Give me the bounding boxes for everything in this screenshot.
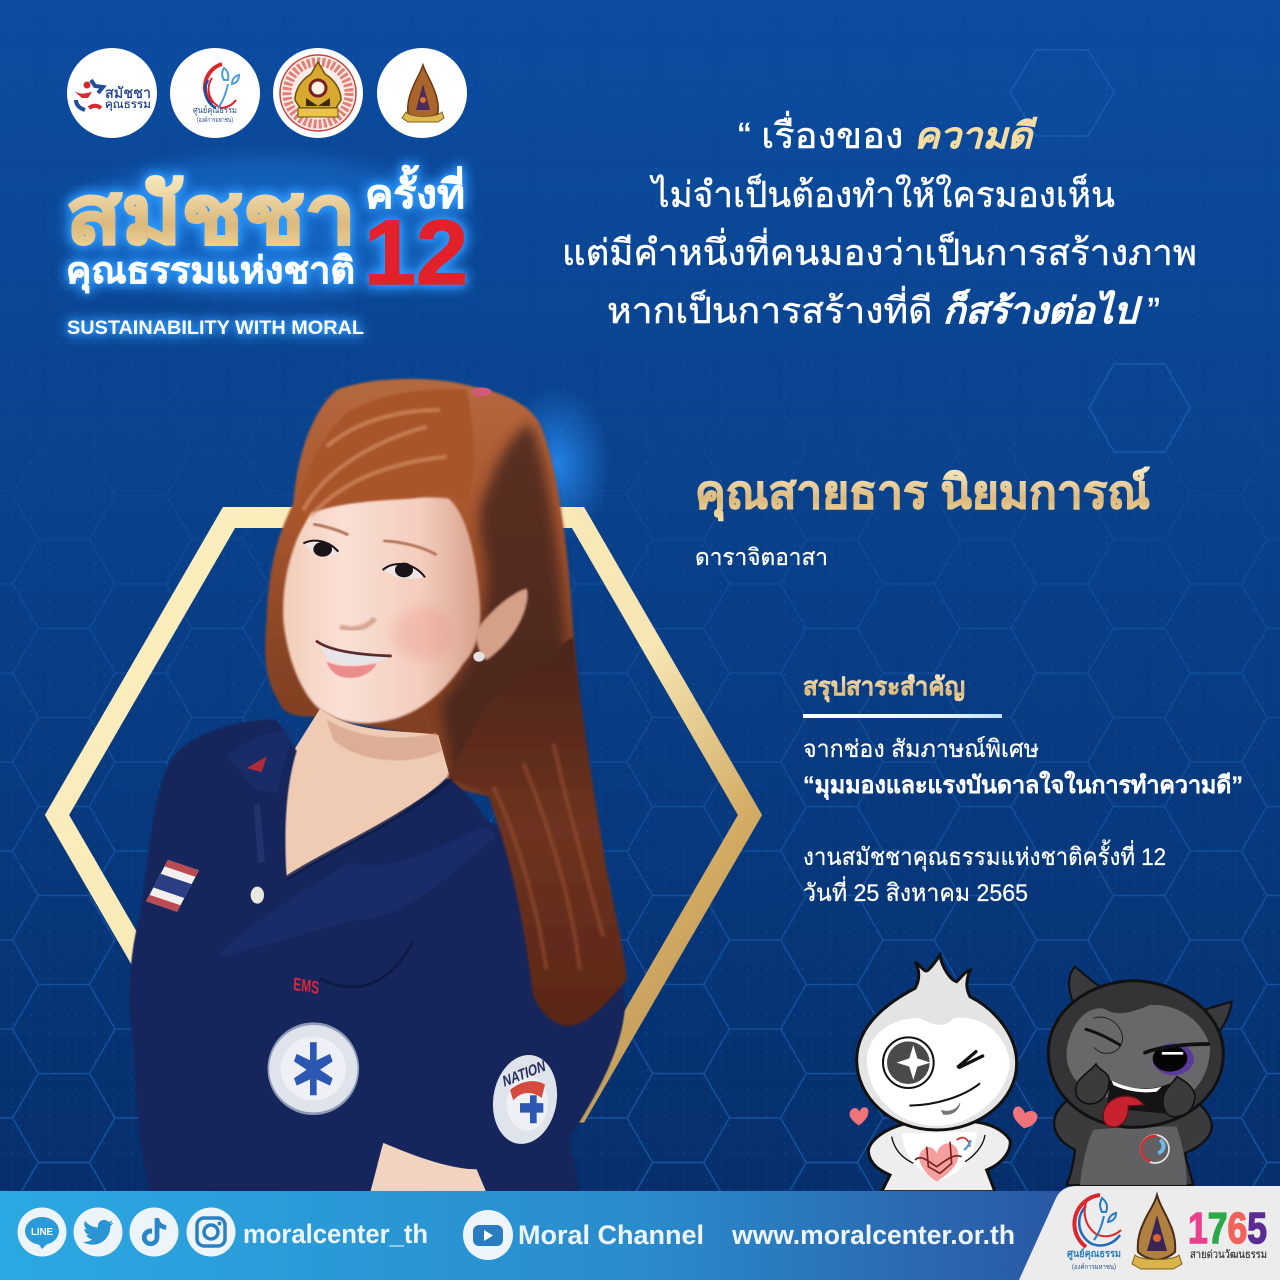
sleeve badge: NATION <box>502 1056 547 1090</box>
blush <box>393 607 453 660</box>
website: www.moralcenter.or.th <box>731 1220 1015 1250</box>
handle: moralcenter_th <box>243 1219 428 1249</box>
face mask <box>1067 1005 1210 1100</box>
star eye <box>883 1037 934 1088</box>
quote <box>562 111 1197 331</box>
horns <box>1069 967 1100 1003</box>
footer logo: crest <box>1132 1195 1182 1269</box>
nose shadow <box>340 618 375 629</box>
eyes and brows <box>303 524 437 579</box>
scrunchie <box>472 387 492 397</box>
quote line 4: หากเป็นการสร้างที่ดี ก็สร้างต่อไป ” <box>607 286 1160 331</box>
title lockup <box>45 145 485 339</box>
winking eye <box>958 1052 983 1067</box>
logo: กระทรวงวัฒนธรรม crest <box>377 48 467 138</box>
ear <box>476 588 528 660</box>
portrait <box>130 379 627 1193</box>
neck <box>282 709 450 878</box>
white corner panel <box>1019 1186 1280 1280</box>
footer logo: crescent: (องค์การมหาชน) <box>1072 1263 1116 1271</box>
icon: Instagram <box>186 1208 236 1256</box>
body <box>1054 1097 1212 1185</box>
mouth <box>1107 1080 1170 1113</box>
head and front hair <box>283 387 627 1026</box>
logo: ศูนย์คุณธรรม: (องค์การมหาชน) <box>197 116 233 124</box>
hearts <box>850 1107 868 1125</box>
open eye <box>1153 1043 1194 1075</box>
logo: สมัชชาคุณธรรม: สมัชชา <box>105 85 151 102</box>
mascots <box>850 955 1232 1192</box>
summary heading: สรุปสาระสำคัญ <box>803 673 965 703</box>
summary text <box>803 735 1243 907</box>
gold hexagon frame <box>57 518 750 1112</box>
white mascot <box>850 955 1037 1192</box>
collar <box>220 730 497 958</box>
hands <box>1076 1064 1109 1104</box>
heart hands <box>919 1143 959 1182</box>
name: คุณสายธาร นิยมการณ์ <box>695 466 1150 521</box>
title: คุณธรรมแห่งชาติ: คุณธรรมแห่งชาติ <box>66 250 355 294</box>
footer bar <box>0 1186 1280 1280</box>
footer logo: crescent <box>1067 1195 1121 1271</box>
quote line 2: ไม่จำเป็นต้องทำให้ใครมองเห็น <box>649 172 1115 215</box>
black mascot <box>1048 967 1232 1185</box>
icon: LINE <box>18 1208 66 1256</box>
footer logo: 1765: สายด่วนวัฒนธรรม <box>1190 1249 1267 1261</box>
logo: สมัชชาคุณธรรม <box>67 48 157 138</box>
earring <box>473 652 485 662</box>
icon: Twitter <box>74 1208 122 1256</box>
summary line 2: “มุมมองและแรงบันดาลใจในการทำความดี” <box>803 770 1243 801</box>
logo: กระทรวงศึกษาธิการ seal <box>273 48 363 138</box>
sleeve badge <box>485 1041 565 1158</box>
bang highlights <box>303 410 447 517</box>
placket button <box>251 887 264 904</box>
flag patch <box>146 860 199 912</box>
EMS embroidery: EMS <box>293 974 320 999</box>
chest badge <box>268 1024 358 1114</box>
hair tail <box>447 637 627 1026</box>
footer logo: crescent: ศูนย์คุณธรรม <box>1067 1248 1121 1261</box>
collar embroidery <box>247 756 267 772</box>
title: สมัชชา: สมัชชา <box>66 170 356 261</box>
shirt <box>130 719 625 1193</box>
head <box>857 955 1017 1130</box>
summary line 3: งานสมัชชาคุณธรรมแห่งชาติครั้งที่ 12 <box>803 839 1166 872</box>
summary line 1: จากช่อง สัมภาษณ์พิเศษ <box>803 735 1039 763</box>
summary line 4: วันที่ 25 สิงหาคม 2565 <box>803 876 1028 907</box>
smile <box>909 1083 980 1106</box>
pocket line <box>320 942 413 987</box>
icon: YouTube <box>463 1210 513 1260</box>
channel name: Moral Channel <box>518 1220 704 1250</box>
arm <box>370 1143 487 1193</box>
body <box>868 1122 1010 1192</box>
winking eye <box>1086 1029 1120 1045</box>
summary rule <box>803 714 1002 718</box>
quote line 1: “ เรื่องของ ความดี <box>738 111 1038 156</box>
tongue <box>1103 1096 1144 1127</box>
face <box>283 497 480 723</box>
quote line 3: แต่มีคำหนึ่งที่คนมองว่าเป็นการสร้างภาพ <box>562 228 1197 273</box>
back hair <box>265 379 593 820</box>
logo: ศูนย์คุณธรรม: ศูนย์คุณธรรม <box>193 104 237 116</box>
footer logo: 1765: 1765 <box>1188 1204 1267 1253</box>
title: ครั้งที่: ครั้งที่ <box>365 165 465 217</box>
tail highlights <box>493 743 603 970</box>
logo: ศูนย์คุณธรรม <box>170 48 260 138</box>
icon: LINE: LINE <box>31 1227 53 1238</box>
logo: สมัชชาคุณธรรม: คุณธรรม <box>105 99 151 111</box>
logo row <box>67 48 467 138</box>
chest emblem <box>1141 1135 1169 1163</box>
head <box>1048 981 1223 1127</box>
smile <box>316 641 392 678</box>
title: 12: 12 <box>364 202 468 304</box>
bangs <box>295 389 474 537</box>
tagline: SUSTAINABILITY WITH MORAL <box>67 318 364 339</box>
role: ดาราจิตอาสา <box>695 544 828 570</box>
chest emblem <box>957 1138 970 1147</box>
icon: TikTok <box>130 1208 178 1256</box>
